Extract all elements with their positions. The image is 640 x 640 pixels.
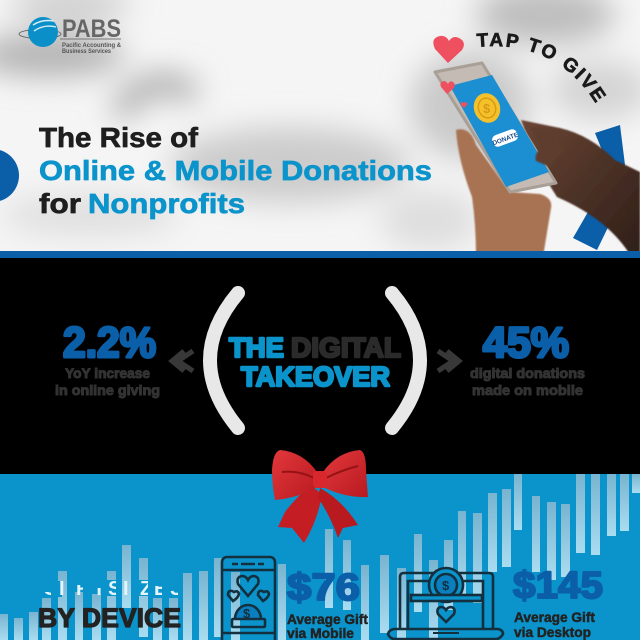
stat: $145 desktop: Average Gift: [514, 609, 595, 625]
icon: smartphone with donate screen: [435, 63, 556, 192]
curved label: tap to give: TAP TO GIVE: [476, 32, 606, 104]
panel: hero header: [0, 0, 640, 258]
icon: laptop donation: [388, 568, 503, 639]
stat: 2.2%: in online giving: [55, 382, 160, 398]
icon: heart small on phone: [440, 81, 455, 94]
heading: by device: BY DEVICE: [38, 603, 181, 633]
icon: mobile donation: $: [243, 606, 251, 621]
left bracket: [210, 293, 238, 428]
heading: the digital takeover: THE: [229, 332, 284, 363]
stat: $76 mobile: $76: [287, 567, 360, 609]
icon: mobile donation: [222, 557, 275, 640]
stat: $145 desktop: via Desktop: [514, 624, 591, 640]
stat: 2.2%: [55, 319, 160, 398]
heading: gift sizes: GIFT SIZES: [43, 578, 183, 600]
title: [39, 122, 432, 219]
logo: PABS: [19, 15, 122, 55]
blue divider strip: [0, 251, 640, 258]
blurred photo background: [0, 0, 640, 251]
chart: decorative bars: [0, 474, 640, 640]
button: donate: DONATE: [492, 131, 520, 147]
panel: gift sizes by device: [0, 474, 640, 640]
logo: PABS: Pacific Accounting &: [62, 43, 122, 49]
stat: $76 mobile: [287, 567, 368, 640]
logo: PABS: PABS: [62, 15, 121, 43]
decorative blue arc stripes: [573, 125, 625, 250]
stat: 2.2%: YoY increase: [65, 365, 150, 381]
icon: right hand behind phone: [521, 120, 640, 258]
stat: $76 mobile: Average Gift: [287, 611, 368, 627]
stat: $145 desktop: $145: [513, 565, 603, 607]
title: The Rise of: [39, 122, 199, 153]
heading: the digital takeover: DIGITAL: [291, 332, 401, 363]
logo: PABS: Business Services: [62, 49, 112, 55]
title: Online & Mobile Donations: [39, 155, 432, 186]
icon: tiny heart: [461, 102, 467, 108]
icon: laptop donation: $: [442, 578, 450, 593]
title: for: [39, 188, 81, 219]
panel: the digital takeover: [0, 258, 640, 474]
icon: heart large: [433, 36, 464, 63]
title: Nonprofits: [88, 188, 245, 219]
stat: 2.2%: 2.2%: [63, 319, 156, 367]
stat: 45%: [470, 319, 585, 398]
icon: red ribbon bow: [272, 450, 368, 543]
arrow: left chevrons: [172, 351, 193, 371]
heading: the digital takeover: TAKEOVER: [241, 361, 390, 392]
icon: gold coin: $: [483, 101, 491, 116]
stat: 45%: made on mobile: [472, 382, 583, 398]
heading: the digital takeover: [229, 332, 401, 392]
stat: 45%: digital donations: [470, 365, 585, 381]
stat: 45%: 45%: [483, 319, 569, 367]
icon: left hand holding phone: [456, 129, 551, 257]
arrow: right chevrons: [438, 351, 459, 371]
knockout gaps behind gift sizes: [58, 580, 148, 597]
right bracket: [392, 293, 420, 428]
icon: thumb on screen: [530, 128, 562, 166]
decorative blue circle: [0, 149, 19, 202]
stat: $145 desktop: [513, 565, 603, 640]
